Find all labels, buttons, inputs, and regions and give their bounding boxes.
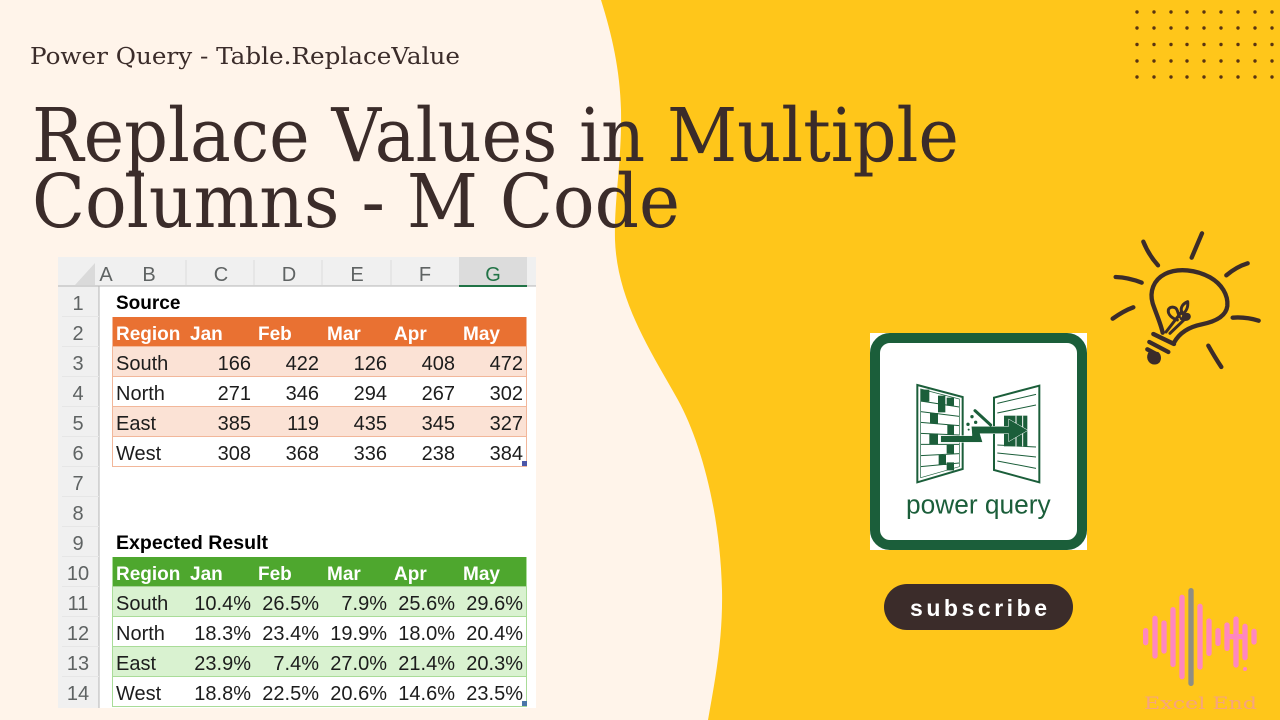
column headers: F: [419, 264, 431, 286]
source table: Source: [116, 293, 180, 314]
source table: 345: [422, 413, 455, 435]
expected result table: 23.9%: [194, 653, 251, 675]
source table: 346: [286, 383, 319, 405]
expected result table: [112, 533, 527, 706]
source table: West: [116, 443, 162, 465]
expected result table: 23.4%: [262, 623, 319, 645]
source table: 166: [218, 353, 251, 375]
source table: Jan: [190, 324, 223, 345]
brand logo: Excel End waveform: Excel End: [1144, 694, 1257, 714]
logo: power query: [870, 333, 1087, 550]
source table: Feb: [258, 324, 292, 345]
source table: 408: [422, 353, 455, 375]
row headers: 8: [72, 503, 84, 525]
source table: 271: [218, 383, 251, 405]
source table: 327: [490, 413, 523, 435]
expected result table: West: [116, 683, 162, 705]
title: Columns - M Code: [32, 159, 680, 245]
expected result table: 14.6%: [398, 683, 455, 705]
subscribe button: subscribe: [910, 595, 1047, 621]
expected result table: 26.5%: [262, 593, 319, 615]
source table: 308: [218, 443, 251, 465]
expected result table: 10.4%: [194, 593, 251, 615]
row headers: 4: [72, 383, 84, 405]
row headers: 1: [72, 293, 84, 315]
subscribe button: [884, 584, 1073, 630]
dot grid decoration: [1135, 10, 1274, 79]
panel: spreadsheet screenshot: [58, 257, 536, 708]
row headers: [67, 293, 89, 705]
row headers: 7: [72, 473, 84, 495]
source table: North: [116, 383, 165, 405]
expected result table: 22.5%: [262, 683, 319, 705]
expected result table: 18.8%: [194, 683, 251, 705]
source table: East: [116, 413, 156, 435]
row headers: 9: [72, 533, 84, 555]
source table: [112, 293, 527, 466]
row headers: 12: [67, 623, 89, 645]
source table: 435: [354, 413, 387, 435]
expected result table: Apr: [394, 564, 427, 585]
expected result table: 21.4%: [398, 653, 455, 675]
source table: 472: [490, 353, 523, 375]
column headers: [99, 264, 501, 286]
source table: 368: [286, 443, 319, 465]
expected result table: May: [463, 564, 500, 585]
expected result table: 25.6%: [398, 593, 455, 615]
column headers: E: [350, 264, 364, 286]
expected result table: Feb: [258, 564, 292, 585]
source table: 336: [354, 443, 387, 465]
expected result table: 7.4%: [273, 653, 319, 675]
column headers: B: [142, 264, 156, 286]
expected result table: 20.3%: [466, 653, 523, 675]
source table: 422: [286, 353, 319, 375]
source table: South: [116, 353, 168, 375]
column headers: G: [485, 264, 501, 286]
title: [32, 93, 959, 245]
subtitle: Power Query - Table.ReplaceValue: [30, 42, 460, 70]
logo artwork: [906, 385, 1051, 520]
row headers: 10: [67, 563, 89, 585]
yellow curved background panel: [601, 0, 1280, 720]
row headers: 3: [72, 353, 84, 375]
source table: 385: [218, 413, 251, 435]
expected result table: 18.0%: [398, 623, 455, 645]
brand logo: Excel End waveform: [1144, 591, 1257, 714]
row headers: 13: [67, 653, 89, 675]
source table: 294: [354, 383, 387, 405]
title: Replace Values in Multiple: [32, 93, 959, 179]
column headers: A: [99, 264, 113, 286]
logo text: power query: [906, 490, 1051, 520]
expected result table: Region: [116, 564, 180, 585]
expected result table: 23.5%: [466, 683, 523, 705]
column headers: C: [214, 264, 228, 286]
expected result table: Mar: [327, 564, 361, 585]
icon: light bulb: [1113, 233, 1259, 367]
row headers: 5: [72, 413, 84, 435]
row headers: 6: [72, 443, 84, 465]
row headers: 11: [68, 593, 88, 615]
source table: 119: [287, 413, 319, 435]
expected result table: 27.0%: [330, 653, 387, 675]
expected result table: 29.6%: [466, 593, 523, 615]
expected result table: 20.6%: [330, 683, 387, 705]
expected result table: 20.4%: [466, 623, 523, 645]
row headers: 14: [67, 683, 89, 705]
row headers: 2: [72, 323, 84, 345]
expected result table: East: [116, 653, 156, 675]
expected result table: 18.3%: [194, 623, 251, 645]
expected result table: Expected Result: [116, 533, 269, 554]
column headers: D: [282, 264, 296, 286]
expected result table: South: [116, 593, 168, 615]
source table: 126: [354, 353, 387, 375]
source table: May: [463, 324, 500, 345]
source table: 267: [422, 383, 455, 405]
source table: 302: [490, 383, 523, 405]
expected result table: Jan: [190, 564, 223, 585]
source table: 238: [422, 443, 455, 465]
source table: 384: [490, 443, 523, 465]
expected result table: 7.9%: [341, 593, 387, 615]
source table: Mar: [327, 324, 361, 345]
expected result table: North: [116, 623, 165, 645]
source table: Apr: [394, 324, 427, 345]
expected result table: 19.9%: [330, 623, 387, 645]
source table: Region: [116, 324, 180, 345]
